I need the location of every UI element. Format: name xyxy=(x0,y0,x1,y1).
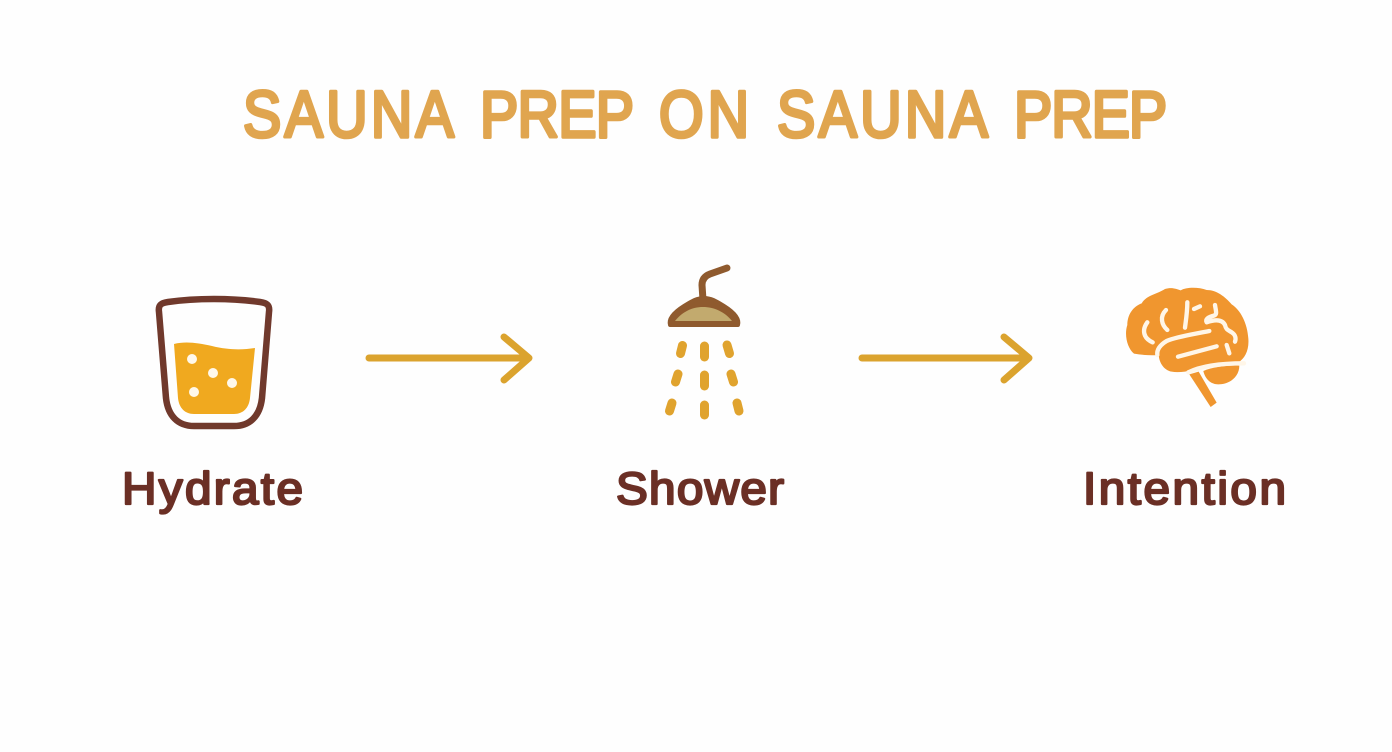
water drops xyxy=(670,345,739,415)
arrow: hydrate to shower xyxy=(369,337,529,380)
arrow: shower to intention xyxy=(862,337,1029,380)
title: ON xyxy=(659,78,749,152)
title: PREP xyxy=(1014,78,1167,152)
shower dome inner xyxy=(675,307,732,321)
brain folds xyxy=(1144,302,1244,372)
brain shape xyxy=(1126,288,1248,362)
title: PREP xyxy=(480,78,634,152)
cerebellum xyxy=(1203,366,1239,384)
title: SAUNA xyxy=(243,78,455,152)
title: SAUNA xyxy=(777,78,989,152)
shower pipe xyxy=(702,268,727,300)
icon: brain xyxy=(1126,288,1248,407)
label: intention: Intention xyxy=(1083,463,1286,514)
label: shower: Shower xyxy=(616,463,784,514)
title xyxy=(243,78,1167,152)
glass liquid xyxy=(174,343,255,414)
bubbles xyxy=(187,354,237,397)
glass outline xyxy=(159,299,269,426)
step 2: shower xyxy=(616,268,784,514)
step 1: hydrate xyxy=(122,299,303,514)
shower dome xyxy=(670,298,738,325)
icon: shower head xyxy=(670,268,739,415)
label: hydrate: Hydrate xyxy=(122,463,303,514)
brain stem xyxy=(1189,372,1217,407)
step 3: intention xyxy=(1083,288,1286,514)
brain temporal lobe xyxy=(1159,334,1238,372)
icon: glass of water xyxy=(159,299,269,426)
